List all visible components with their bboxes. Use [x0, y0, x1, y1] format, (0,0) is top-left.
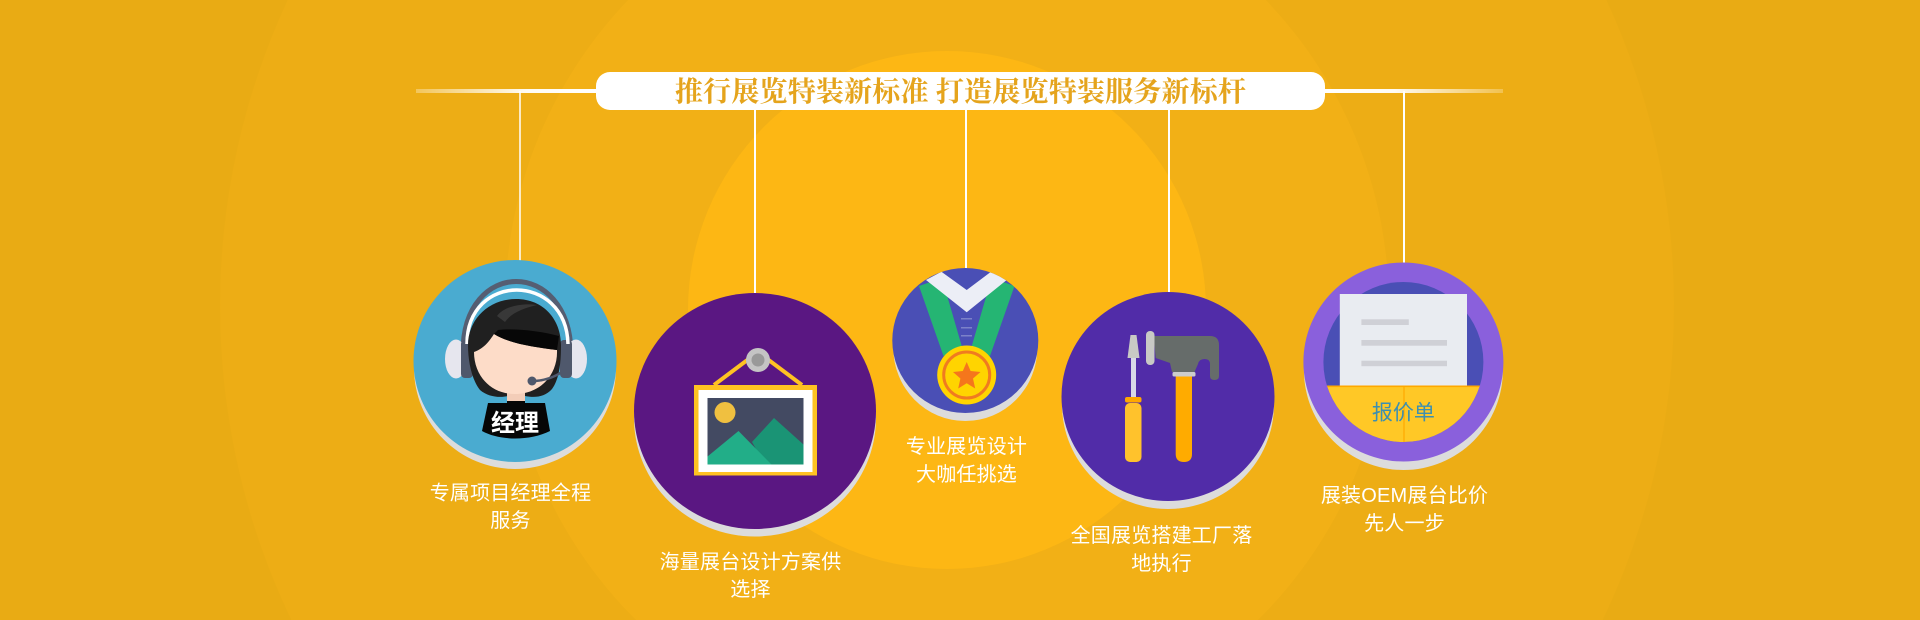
title pill: 推行展览特装新标准 打造展览特装服务新标杆 — [675, 75, 1246, 108]
tools circle — [1062, 292, 1274, 501]
icon: manager with headset: 经理 — [491, 410, 539, 437]
panel: design cases — [634, 293, 876, 536]
panel: OEM quotation — [1303, 262, 1503, 470]
panel: project manager — [414, 260, 616, 469]
label: designers: 专业展览设计 — [906, 435, 1027, 458]
hanging strings — [519, 91, 1405, 294]
tools circle shadow — [1062, 300, 1274, 509]
icon: hammer — [1146, 331, 1219, 462]
icon: screwdriver — [1125, 335, 1142, 462]
icon: quotation sheet: 报价单 — [1372, 402, 1435, 424]
title pill — [596, 72, 1325, 110]
panel: designers medal — [892, 268, 1038, 421]
icon: framed picture — [694, 348, 817, 476]
cases circle — [634, 293, 876, 529]
label: OEM comparison: 先人一步 — [1364, 512, 1445, 535]
medal circle — [892, 268, 1038, 413]
icon: quotation sheet — [1323, 282, 1483, 442]
manager circle shadow — [414, 267, 616, 469]
label: OEM comparison: 展装OEM展台比价 — [1321, 484, 1488, 507]
label: design cases: 选择 — [730, 578, 771, 601]
panel: factories tools — [1062, 292, 1274, 509]
title bar right wing — [1322, 89, 1503, 93]
medal circle shadow — [893, 275, 1037, 421]
icon: medal — [919, 272, 1014, 404]
icon: manager with headset — [445, 282, 587, 438]
quote circle shadow — [1304, 270, 1503, 470]
title bar left wing — [416, 89, 600, 93]
manager circle — [414, 260, 616, 462]
cases circle shadow — [634, 300, 876, 536]
label: factories: 全国展览搭建工厂落 — [1071, 524, 1252, 547]
label: manager service: 服务 — [490, 509, 531, 532]
label: designers: 大咖任挑选 — [916, 463, 1017, 486]
label: manager service: 专属项目经理全程 — [430, 482, 591, 504]
quote circle — [1303, 262, 1503, 462]
label: design cases: 海量展台设计方案供 — [660, 550, 841, 574]
label: factories: 地执行 — [1131, 552, 1192, 575]
